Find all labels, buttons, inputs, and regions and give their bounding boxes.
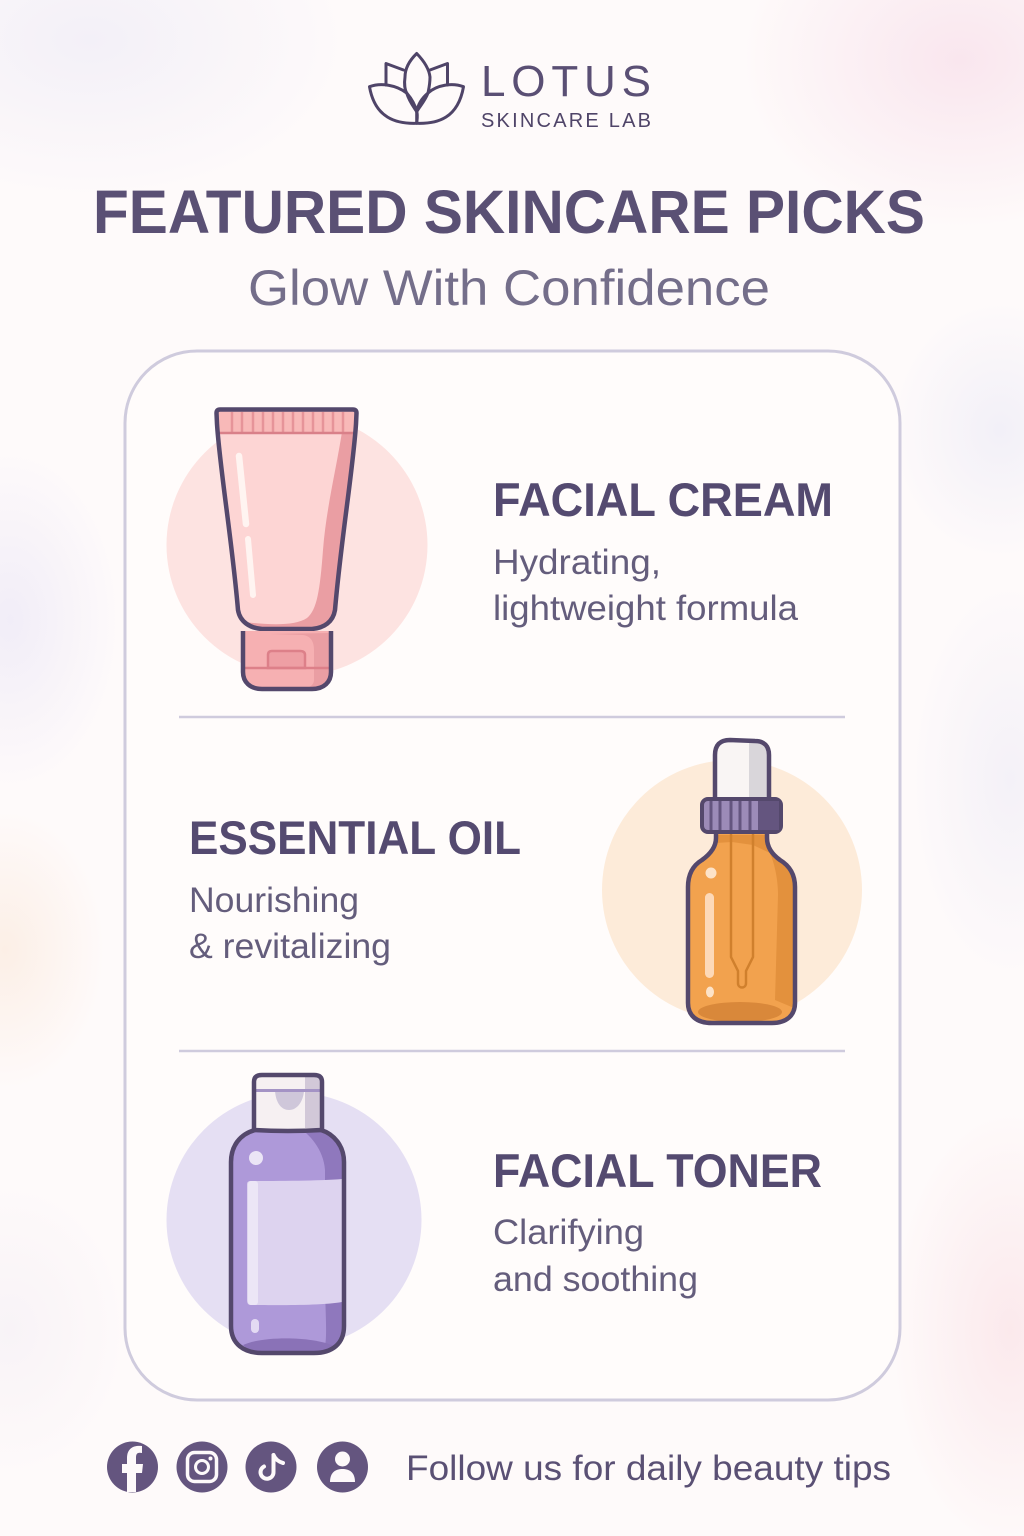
product: facial toner — [166, 1075, 422, 1353]
text: essential oil: & revitalizing — [189, 927, 391, 966]
icon: backdrop circle lavender — [166, 1092, 422, 1348]
text: facial cream: lightweight formula — [493, 589, 799, 628]
heading: FACIAL TONER — [493, 1144, 822, 1197]
text: facial cream — [493, 473, 833, 628]
footer text: Follow us for daily beauty tips — [406, 1449, 891, 1488]
product: essential oil — [602, 740, 862, 1023]
logo wordmark: LOTUS — [481, 57, 651, 106]
logo tagline: SKINCARE LAB — [481, 110, 651, 132]
footer: social icons — [107, 1442, 368, 1492]
heading: FACIAL CREAM — [493, 473, 833, 526]
subtitle: Glow With Confidence — [248, 260, 770, 316]
description: Hydrating, — [493, 543, 661, 582]
icon: dropper bottle — [688, 740, 795, 1023]
icon: toner bottle — [231, 1075, 344, 1353]
text: essential oil — [189, 811, 521, 966]
title: FEATURED SKINCARE PICKS — [93, 178, 925, 246]
logo: Lotus Skincare Lab — [370, 54, 651, 132]
icon: profile — [317, 1442, 368, 1492]
panel: product card — [125, 351, 900, 1400]
product: facial cream — [166, 410, 428, 689]
text: facial toner — [493, 1144, 822, 1299]
icon: lotus flower — [370, 54, 464, 123]
icon: backdrop circle pink — [166, 414, 428, 676]
icon: facebook — [107, 1442, 158, 1492]
description: Clarifying — [493, 1213, 644, 1252]
icon: cream tube — [216, 410, 356, 689]
icon: backdrop circle peach — [602, 760, 862, 1020]
icon: tiktok — [246, 1442, 296, 1492]
text: facial toner: and soothing — [493, 1260, 698, 1299]
icon: instagram — [176, 1442, 228, 1492]
heading: ESSENTIAL OIL — [189, 811, 521, 864]
description: Nourishing — [189, 881, 359, 920]
